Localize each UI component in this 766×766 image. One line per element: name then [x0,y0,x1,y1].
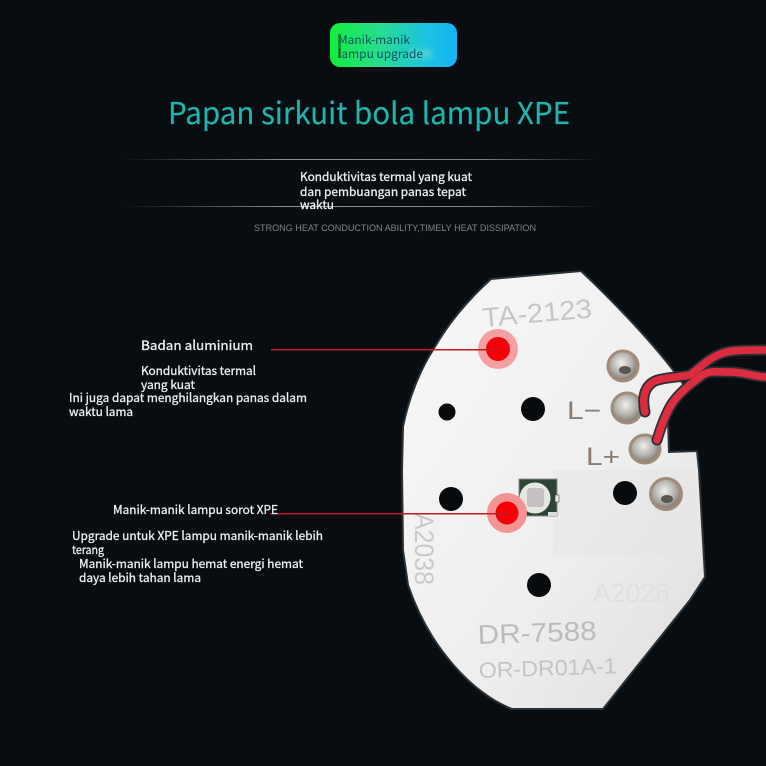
mounting holes [438,397,637,597]
board print: A2038: A2038 [409,513,439,585]
badge: upgrade label [330,23,457,67]
solder pads [608,351,682,510]
description: XPE beads [72,527,323,586]
divider lines [120,159,600,160]
description: aluminium: waktu lama [69,403,133,420]
heading: Manik-manik lampu sorot XPE: Manik-manik lampu sorot XPE [113,501,278,518]
board print: OR-DR01A-1: OR-DR01A-1 [478,653,617,683]
description: aluminium: Konduktivitas termal [141,362,256,379]
circuit board photo [402,271,766,709]
title: Papan sirkuit bola lampu XPE [168,89,570,133]
callout: aluminium body marker [271,329,518,369]
board print: TA-2123: TA-2123 [481,294,593,333]
subtitle text block [300,168,472,213]
subtitle text block: Konduktivitas termal yang kuat [300,168,472,185]
board print: L+: L+ [586,443,620,471]
badge: upgrade label: lampu upgrade [338,45,423,62]
description: aluminium: yang kuat [141,376,195,393]
subtitle text block: dan pembuangan panas tepat [300,183,466,200]
board outline [402,271,705,709]
description: XPE beads: Upgrade untuk XPE lampu manik-manik lebih [72,527,323,544]
english subtitle: STRONG HEAT CONDUCTION ABILITY,TIMELY HEAT DISSIPATION [254,223,536,233]
description: aluminium: Ini juga dapat menghilangkan panas dalam [69,389,307,406]
faint board panel [553,470,695,555]
red wires [644,350,766,440]
callout: XPE bead marker [270,493,527,533]
board print: DR-7588: DR-7588 [477,616,597,650]
text block: XPE beads [72,501,323,586]
description: XPE beads: terang [72,541,104,558]
badge: upgrade label: Manik-manik [338,31,410,48]
board print: A2026: A2026 [593,578,670,608]
XPE LED chip [519,479,559,516]
text block: aluminium body [69,335,307,420]
board print: L-: L− [567,397,601,425]
description: XPE beads: daya lebih tahan lama [79,569,201,586]
description: aluminium [69,362,307,420]
description: XPE beads: Manik-manik lampu hemat energi hemat [79,555,303,572]
heading: Badan aluminium: Badan aluminium [141,335,253,354]
subtitle text block: waktu [300,196,334,213]
